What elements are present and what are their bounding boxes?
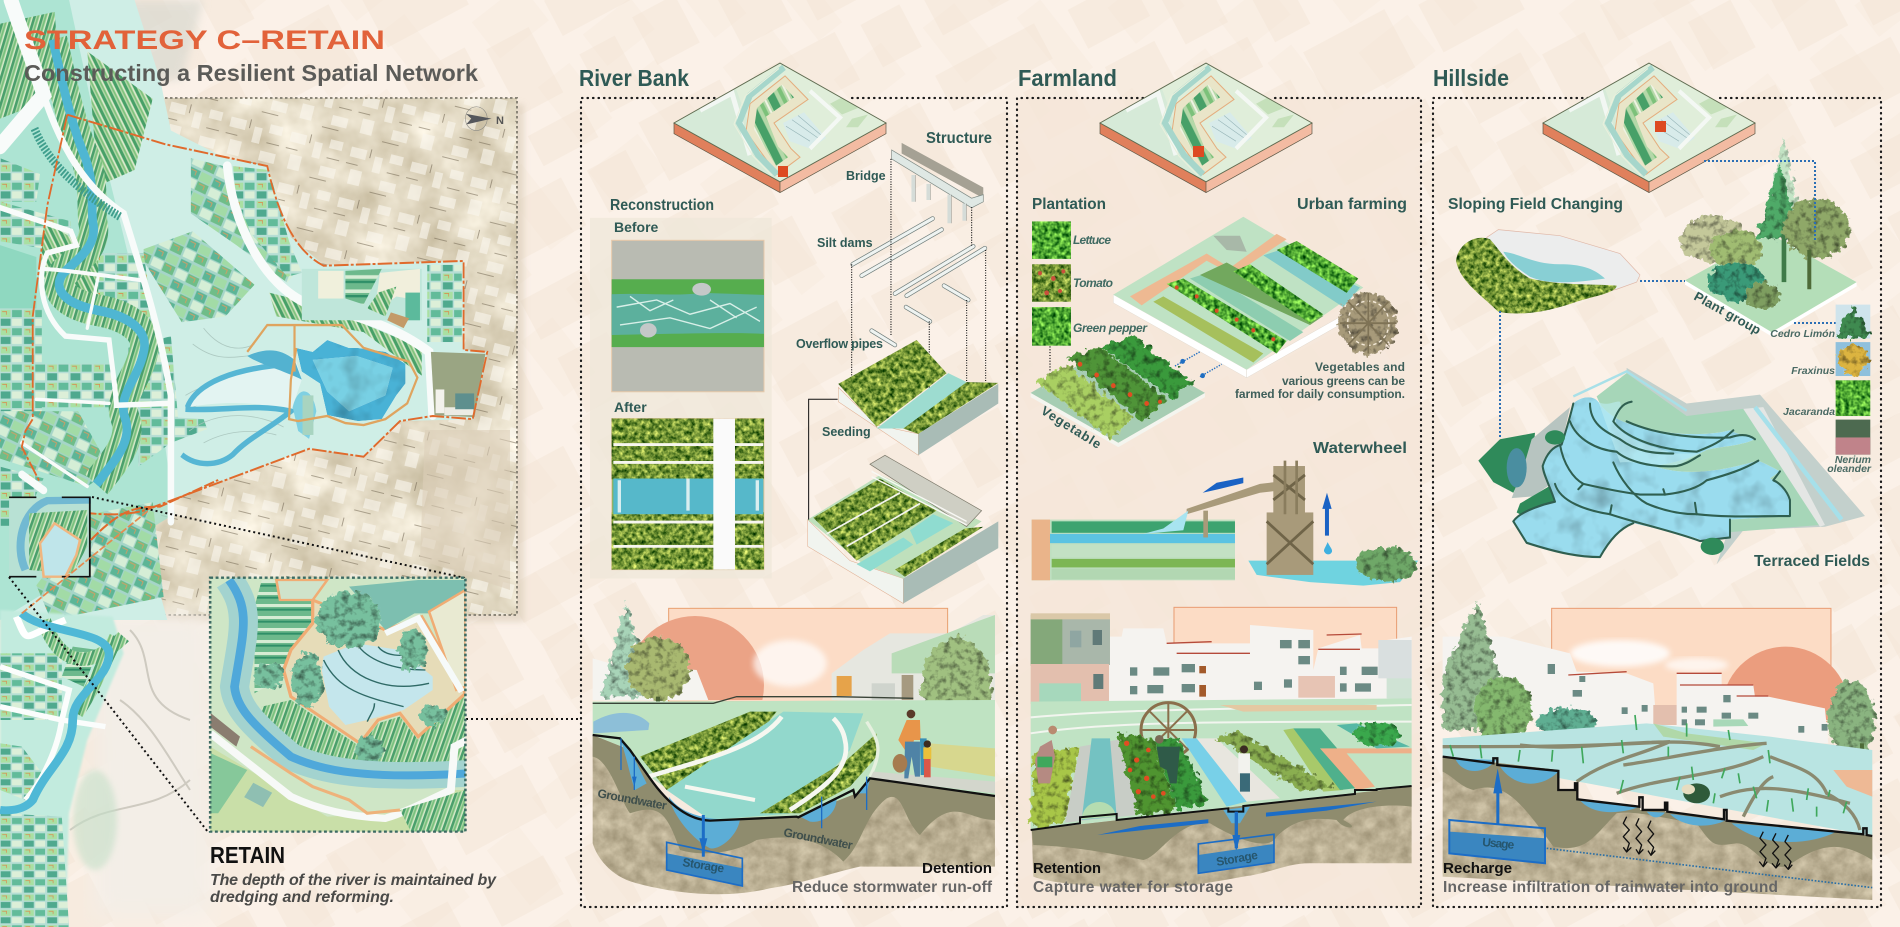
icon: waterwheel top view (1339, 292, 1398, 355)
inset lower fields and road (210, 713, 467, 832)
people and dog (893, 710, 931, 778)
town buildings (1108, 625, 1412, 702)
sports yard (431, 352, 485, 417)
soil layers (1443, 757, 1872, 900)
detention lake and streams (182, 340, 405, 464)
arrows and droplet (1203, 477, 1332, 554)
text: vegetable tile label: Vegetable (1038, 403, 1104, 452)
text: bridge: Bridge (846, 169, 886, 183)
north label: N (496, 115, 504, 127)
text: recharge: Recharge (1443, 860, 1512, 877)
panel: farmland (1017, 59, 1421, 907)
trees (1443, 600, 1875, 767)
panel: site master plan map (0, 0, 581, 927)
text: species labels: Fraxinus (1791, 365, 1835, 377)
text: silt dams: Silt dams (817, 236, 873, 250)
text block: retain (210, 842, 497, 906)
colored watershed plan upper (0, 0, 492, 620)
text: farm description: various greens can be (1282, 374, 1405, 388)
plantation thumbnails (1032, 221, 1071, 371)
text: farm description: Vegetables and (1315, 360, 1405, 374)
project boundary (11, 115, 487, 522)
river (53, 40, 145, 484)
dotted drop lines (852, 159, 986, 407)
sloping field model (1456, 230, 1640, 314)
text: species labels: Cedro Limón (1770, 328, 1835, 340)
isometric locator tile (670, 59, 890, 193)
lower bank block (808, 455, 998, 604)
section: detention (593, 600, 995, 894)
text block: retain: dredging and reforming. (210, 889, 394, 906)
urban farming platform (1113, 217, 1398, 378)
inset: terrace enlargement (210, 578, 469, 832)
colored watershed plan lower (0, 480, 218, 927)
text: groundwater right: Groundwater (782, 825, 854, 852)
waterwheel irrigation diagram (1032, 461, 1418, 586)
heading: farmland: Farmland (1018, 65, 1117, 91)
trees (1680, 136, 1850, 309)
town buildings (1443, 637, 1828, 743)
rice seedlings (1450, 715, 1847, 817)
text: detention: Detention (922, 860, 992, 877)
silt dams and pipes (853, 219, 985, 345)
sky and sun (640, 608, 948, 702)
infiltration squiggle arrows (1623, 817, 1792, 869)
plant group (1680, 136, 1857, 336)
before image (612, 240, 764, 392)
heading: hillside: Hillside (1433, 65, 1509, 91)
text: species labels: Jacaranda (1783, 406, 1835, 418)
zoom connector lines (9, 497, 581, 832)
faded terrain map lower left (70, 615, 210, 915)
text block: retain: RETAIN (210, 842, 285, 868)
text: species labels: oleander (1827, 463, 1872, 475)
text: overflow pipes: Overflow pipes (796, 337, 883, 351)
upper bank block (838, 340, 998, 455)
text: green pepper: Green pepper (1073, 321, 1148, 335)
text: species labels (1770, 328, 1872, 475)
text: increase infiltration: Increase infiltration of rainwater into ground (1443, 879, 1778, 896)
sky and sun (1551, 608, 1843, 722)
text: after: After (614, 399, 647, 415)
soil layers (1031, 786, 1412, 889)
text: reconstruction labels: Reconstruction (610, 197, 714, 214)
text: terraced fields: Terraced Fields (1754, 553, 1870, 570)
text: groundwater left: Groundwater (596, 786, 668, 813)
lower blocks (0, 617, 124, 927)
plant species thumbnails (1836, 305, 1870, 455)
panel: hillside (1433, 59, 1881, 907)
structure exploded diagram (808, 143, 998, 604)
isometric locator tile (1539, 59, 1759, 193)
text: sloping field: Sloping Field Changing (1448, 196, 1623, 213)
infiltration arrows (621, 738, 867, 857)
left building (1031, 613, 1110, 707)
inset trees (255, 592, 445, 765)
reconstruction before and after (590, 218, 772, 579)
trees (600, 600, 992, 767)
text: storage: Storage (1215, 848, 1259, 869)
building clusters (0, 12, 462, 620)
retaining orange terrace outline (247, 325, 417, 425)
text: capture water: Capture water for storage (1033, 879, 1233, 896)
inset terrace ponds (322, 643, 433, 725)
text: waterwheel: Waterwheel (1313, 440, 1407, 457)
waterwheel in scene (1141, 703, 1196, 757)
groundwater dotted line (1547, 848, 1872, 888)
isometric locator tile (1096, 59, 1316, 193)
contour terrain (185, 328, 287, 443)
people (1035, 726, 1250, 792)
title: STRATEGY C–RETAIN (24, 25, 385, 55)
blue dotted connectors (1500, 161, 1836, 439)
storage tank (1198, 834, 1274, 873)
roads (0, 0, 433, 522)
usage tank and recharge arrow (1449, 768, 1545, 863)
satellite base map (150, 98, 524, 622)
text: storage: Storage (682, 855, 726, 876)
inset river (229, 580, 469, 775)
panel: river bank (579, 59, 1007, 907)
farm fields (1031, 698, 1412, 830)
text: seeding: Seeding (822, 425, 871, 439)
text: usage: Usage (1482, 835, 1515, 852)
text: plantation: Plantation (1032, 196, 1106, 213)
terraced fields (1478, 368, 1865, 564)
farmer (1682, 783, 1710, 803)
text: tomato: Tomato (1073, 276, 1113, 290)
section: recharge (1443, 600, 1875, 900)
text: urban farming: Urban farming (1297, 196, 1407, 213)
tower and trough (1143, 461, 1418, 586)
soil layers (593, 735, 995, 894)
text: farm description (1235, 360, 1405, 401)
text: before: Before (614, 219, 659, 235)
text: reduce stormwater: Reduce stormwater run-off (792, 879, 993, 896)
terrace ponds (1513, 397, 1790, 557)
subtitle: Constructing a Resilient Spatial Network (24, 60, 478, 86)
vegetable tile (1031, 336, 1222, 447)
text: structure heading: Structure (926, 130, 992, 147)
background buildings (593, 615, 995, 707)
text: species labels: Nerium (1835, 454, 1871, 466)
section: retention (1031, 607, 1412, 889)
text block: retain: The depth of the river is maintained by (210, 872, 497, 889)
paddy terraces (1443, 715, 1872, 836)
small area locator (9, 497, 91, 577)
canal strip (1032, 520, 1235, 580)
text: farm description: farmed for daily consumption. (1235, 387, 1405, 401)
heading: river bank: River Bank (579, 65, 689, 91)
bridge (892, 143, 983, 223)
text: retention: Retention (1033, 860, 1101, 877)
middle ground and banks (593, 697, 995, 820)
text: plant group: Plant group (1692, 289, 1764, 338)
text: lettuce: Lettuce (1073, 233, 1111, 247)
runoff arrows (1097, 802, 1377, 852)
after image (612, 419, 764, 570)
farm plots (302, 269, 422, 328)
icon: north arrow (465, 107, 492, 130)
storage tank (667, 842, 742, 886)
lower river (0, 613, 109, 810)
sky (1174, 607, 1397, 674)
